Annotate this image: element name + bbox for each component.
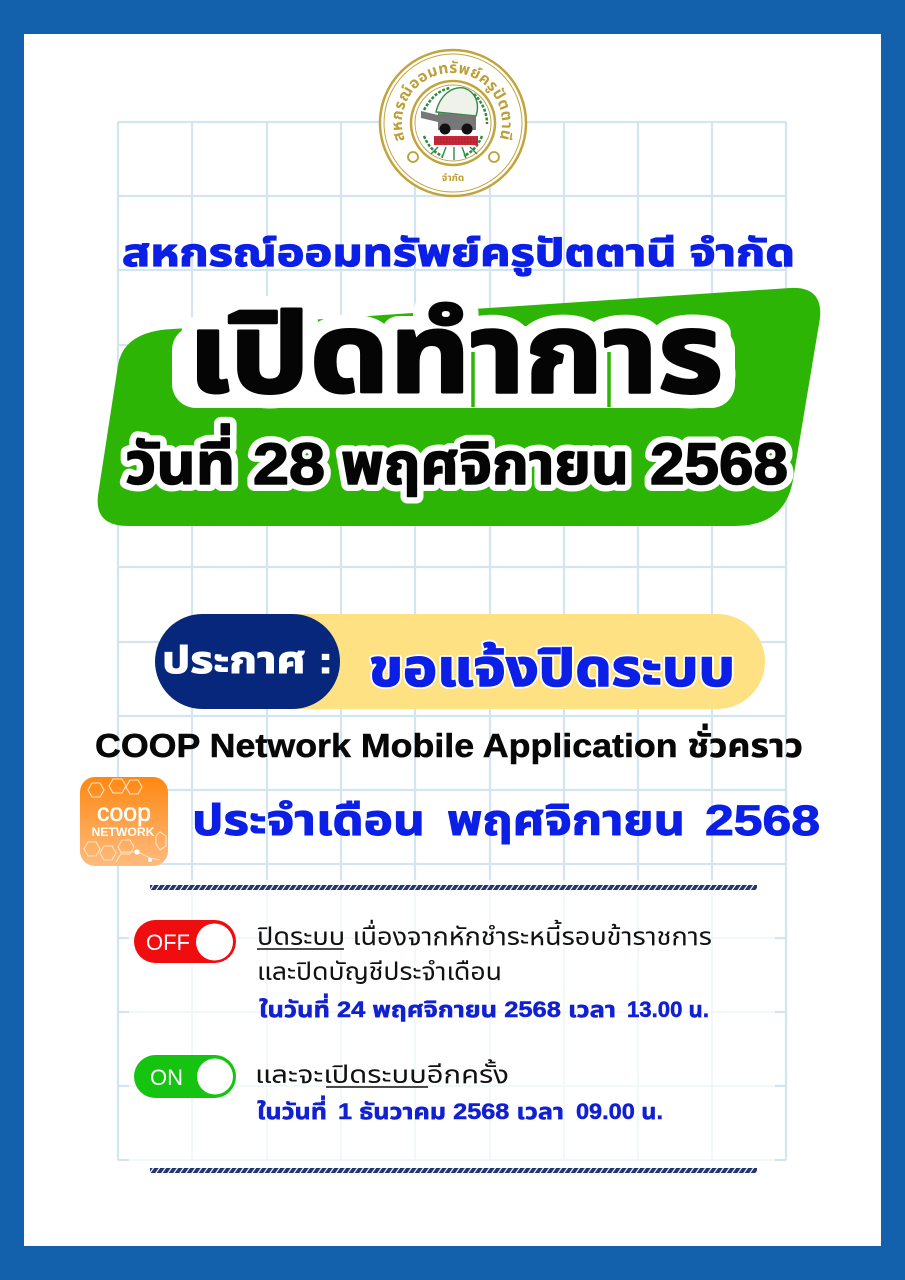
divider bottom: [150, 1168, 757, 1173]
date line: วันที่: [125, 423, 235, 497]
date line: 28: [253, 432, 325, 497]
icon: COOP Network app: coop: [97, 799, 151, 827]
month line: [192, 797, 820, 845]
application line: COOP Network Mobile Application ชั่วคราว: [95, 723, 803, 764]
closure text: ปิดระบบ เนื่องจากหักชำระหนี้รอบข้าราชการ: [257, 919, 712, 951]
reopening date: 1 ธันวาคม 2568 เวลา: [338, 1099, 564, 1124]
organisation heading: สหกรณ์ออมทรัพย์ครูปัตตานี จำกัด: [122, 233, 795, 276]
date line: 2568: [650, 432, 788, 497]
date line: พฤศจิกายน: [341, 432, 629, 497]
month line: 2568: [705, 797, 820, 845]
icon: COOP Network app: [80, 777, 168, 866]
closure date: 13.00 น.: [627, 997, 709, 1022]
announcement message: ขอแจ้งปิดระบบ: [369, 640, 735, 698]
logo seal: สหกรณ์ออมทรัพย์ครูปัตตานี: [393, 60, 512, 141]
closure date: [259, 993, 709, 1022]
closure text: และปิดบัญชีประจำเดือน: [257, 958, 502, 986]
date line: วันที่: [125, 423, 235, 497]
date line: [125, 423, 788, 497]
switch: off: [134, 920, 236, 963]
date line: 28: [253, 432, 325, 497]
month line: พฤศจิกายน: [447, 797, 685, 845]
switch: on: ON: [150, 1065, 183, 1090]
icon: COOP Network app: NETWORK: [92, 827, 155, 839]
closure text: [257, 919, 712, 986]
month line: ประจำเดือน: [192, 797, 425, 845]
logo seal: จำกัด: [442, 172, 464, 184]
headline: open for business: เปิดทำการ: [188, 292, 723, 416]
headline: open for business: เปิดทำการ: [188, 292, 723, 416]
reopening date: ในวันที่: [257, 1095, 327, 1124]
announcement message: ขอแจ้งปิดระบบ: [369, 640, 735, 698]
closure date: ในวันที่ 24 พฤศจิกายน 2568 เวลา: [259, 993, 616, 1022]
announcement pill: [155, 614, 765, 709]
logo seal: [378, 48, 528, 198]
reopening date: 09.00 น.: [576, 1099, 663, 1124]
divider top: [150, 885, 757, 890]
announcement label: ประกาศ :: [162, 640, 333, 681]
date line: 2568: [650, 432, 788, 497]
reopening date: [257, 1095, 663, 1124]
reopening text: และจะเปิดระบบอีกครั้ง: [255, 1058, 509, 1089]
switch: off: OFF: [146, 930, 190, 955]
switch: on: [134, 1055, 236, 1098]
date line: พฤศจิกายน: [341, 432, 629, 497]
green banner: [98, 288, 820, 526]
